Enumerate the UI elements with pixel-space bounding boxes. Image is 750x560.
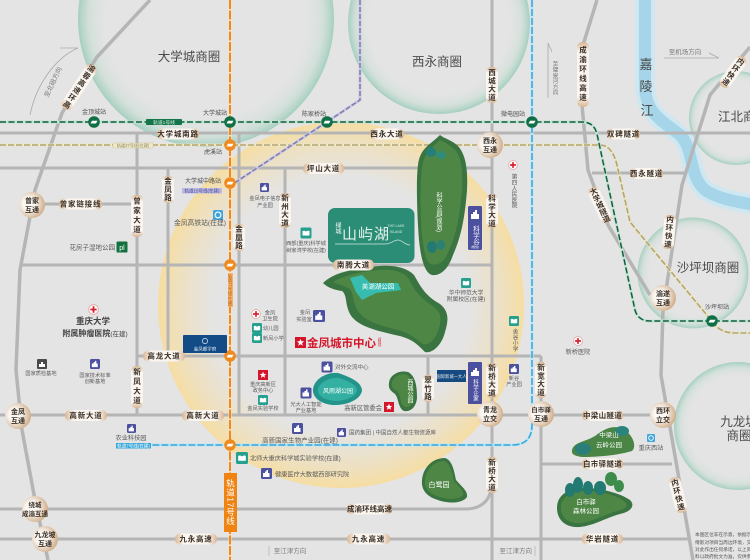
poi: 产业园: 新谷 bbox=[509, 374, 520, 382]
road label: 新州大道: 新州大道 bbox=[280, 192, 290, 227]
interchange: 金凤互通: 互通 bbox=[11, 416, 25, 425]
poi: 国际新城 bbox=[436, 370, 467, 382]
poi: 科学谷: (规划) bbox=[471, 244, 479, 249]
park: 风雨湖公园 bbox=[313, 373, 362, 405]
park: 美湖公园 main green bbox=[323, 266, 447, 352]
poi: 华中师范大学附属校区 bbox=[447, 278, 485, 303]
park: 科学公园(规划): 科学公园(规划) bbox=[435, 191, 442, 232]
road label: 双碑隧道: 双碑隧道 bbox=[607, 128, 640, 138]
line tag: 轨道15号线 bbox=[182, 188, 222, 194]
interchange: 九龙坡互通: 互通 bbox=[38, 539, 52, 548]
interchange: 西环立交: 西环 bbox=[656, 407, 670, 415]
business circle: 江北商圈 bbox=[689, 71, 750, 165]
business circle labels: 西永商圈 bbox=[412, 54, 462, 69]
poi: 产业园 bbox=[506, 364, 522, 388]
road label: 大学城南路: 大学城南路 bbox=[157, 128, 199, 138]
road label: 九永高速 left: 九永高速 bbox=[179, 534, 213, 544]
road label: 坪山大道: 坪山大道 bbox=[307, 163, 340, 173]
poi: 幼儿园: 幼儿园 bbox=[263, 324, 279, 332]
road label: 金凰路: 金凰路 bbox=[234, 224, 244, 250]
disclaimer: 对此作出任何承诺，以上资 bbox=[695, 546, 750, 553]
road label: 南腾大道 bbox=[333, 260, 374, 270]
poi: 金凤电子信息产业园 bbox=[249, 183, 281, 209]
poi: 国药集团 中国自然人都生物资源库 bbox=[337, 428, 436, 437]
interchange: 金凤互通 bbox=[5, 403, 31, 429]
direction: 至江津方向 right bbox=[500, 546, 535, 556]
road label: 西城大道: 西城大道 bbox=[487, 68, 496, 102]
project logo: 山屿湖: ISLAND bbox=[390, 230, 403, 234]
road label: 曾家大道: 曾家大道 bbox=[132, 196, 142, 235]
direction: 至机场方向 bbox=[664, 47, 719, 58]
interchange: 九龙坡互通: 九龙坡 bbox=[34, 530, 56, 539]
poi: 国家质检基地: 国家质检基地 bbox=[25, 369, 57, 377]
river label: 嘉陵江: 江 bbox=[640, 103, 654, 118]
poi: 金凤实验学校: 金凤实验学校 bbox=[247, 404, 279, 412]
interchange: 曾家互通: 曾家 bbox=[25, 196, 39, 205]
business circle labels: 沙坪坝商圈 bbox=[677, 260, 739, 275]
interchange: 绕城成渝互通 bbox=[22, 496, 48, 522]
poi: 健康医疗大数据西部研究院: 健康医疗大数据西部研究院 bbox=[275, 470, 349, 478]
poi: 金凤实验学校 bbox=[247, 395, 279, 412]
interchange: 渝遂互通 bbox=[650, 285, 676, 311]
station names: 大学城中路站 bbox=[185, 177, 221, 185]
poi: 国家质检基地 bbox=[25, 359, 57, 377]
poi: 产业园: 产业园 bbox=[506, 380, 522, 388]
station names: 虎溪站 bbox=[204, 148, 222, 156]
poi: 光大人工智能产业基地: 产业基地 bbox=[296, 406, 316, 414]
station names: 大学城站 bbox=[203, 109, 227, 117]
metro stations: orange line bbox=[224, 139, 236, 451]
poi: 花房子湿地公园: 花房子湿地公园 bbox=[70, 242, 115, 252]
poi: 新桥医院: 新桥医院 bbox=[566, 348, 590, 356]
road label: 成渝环线高速: 成渝环线高速 bbox=[347, 504, 392, 514]
poi: 重庆大学附属肿瘤医院: 重庆大学 bbox=[76, 316, 110, 326]
river label: 嘉陵江: 陵 bbox=[639, 79, 653, 94]
park: 中梁山云岭公园: 中梁山 bbox=[599, 430, 619, 439]
disclaimer: 本图区位非在示意，依据示 bbox=[695, 531, 750, 538]
poi: 科学企家 bbox=[468, 362, 482, 404]
poi: 金凤电子信息产业园: 金凤电子信息 bbox=[249, 194, 281, 202]
poi: 高新国家生物产业园: 高新国家生物产业园(在建) bbox=[262, 436, 338, 444]
poi: 花房子湿地公园: pl bbox=[119, 245, 125, 252]
metro line: 轨道15号线 purple bbox=[230, 0, 360, 186]
direction: 至北碚方向: 至北碚方向 bbox=[42, 65, 64, 99]
park: 美湖公园 main green: 美湖湖公园 bbox=[362, 282, 394, 290]
interchange: 白市驿互通: 互通 bbox=[534, 414, 548, 423]
interchange: 渝遂互通: 互通 bbox=[656, 298, 670, 307]
road label: 内环快速 middle: 内环快速 bbox=[663, 214, 675, 249]
road label: 高新大道 right bbox=[182, 410, 224, 421]
poi: 高新区管委会 bbox=[344, 402, 394, 412]
poi: 重庆大学附属肿瘤医院: 附属肿瘤医院(在建) bbox=[62, 328, 128, 338]
line tag: 轨道7号线 bbox=[116, 442, 151, 450]
river label: 嘉陵江 bbox=[639, 57, 654, 118]
business circle labels bbox=[158, 49, 750, 443]
poi: 西部科学城树家湾学校 bbox=[286, 228, 327, 254]
poi: 北师大重庆科学城实验学校: 北师大重庆科学城实验学校(在建) bbox=[250, 454, 341, 462]
business circle: 沙坪坝商圈 bbox=[638, 218, 748, 328]
poi: 金凤卫生院: 金凤 bbox=[265, 308, 276, 316]
poi: 重庆大学附属肿瘤医院 bbox=[62, 305, 128, 338]
park: 科学公园(规划) bbox=[417, 135, 467, 275]
road label: 成渝环线高速 vertical: 成渝环线高速 bbox=[578, 45, 588, 103]
park: 白市驿森林公园: 森林公园 bbox=[573, 506, 599, 515]
station names: 陈家桥站 bbox=[302, 110, 326, 118]
line tag: 轨道27号线 horizontal: 轨道27号线(在建) bbox=[117, 142, 150, 149]
interchange: 西环立交 bbox=[650, 402, 676, 428]
road label: 中梁山隧道: 中梁山隧道 bbox=[583, 410, 622, 420]
poi: 光大人工智能产业基地: 光大人工智能 bbox=[290, 400, 322, 408]
yellow radius zone around project bbox=[158, 122, 524, 488]
road label: 西永大道: 西永大道 bbox=[370, 128, 404, 138]
poi: 金凤实验室: 实验室 bbox=[296, 315, 312, 323]
interchange: 青龙立交 bbox=[477, 401, 503, 427]
line tag: 轨道1号线 bbox=[146, 119, 182, 126]
poi: 金凤实验室: 金凤 bbox=[300, 308, 311, 316]
line tag: 轨道15号线: 轨道15号线(在建) bbox=[184, 188, 220, 194]
road label: 金凤路: 金凤路 bbox=[163, 176, 172, 202]
poi: 高新国家生物产业园 bbox=[262, 423, 338, 444]
poi: 国家技术标准创新基地: 创新基地 bbox=[85, 377, 105, 385]
project logo: 山屿湖: THE LAKE bbox=[388, 224, 405, 228]
road label: 曾家大道 bbox=[131, 195, 143, 237]
poi: 金凤高铁站 bbox=[174, 210, 226, 227]
poi: 金凤卫生院 bbox=[252, 308, 279, 322]
disclaimer bbox=[695, 531, 750, 560]
road label: 华岩隧道: 华岩隧道 bbox=[586, 534, 619, 544]
poi: 华中师范大学附属校区: 附属校区(在建) bbox=[447, 295, 485, 303]
business circle: 九龙坡商圈 bbox=[674, 362, 750, 490]
road label: 西永隧道: 西永隧道 bbox=[630, 168, 663, 178]
road label: 科学大道: 科学大道 bbox=[487, 193, 496, 228]
interchange: 西永互通: 互通 bbox=[483, 145, 497, 154]
station names bbox=[82, 108, 729, 311]
road label: 高新大道 left: 高新大道 bbox=[69, 410, 103, 420]
road label: 西城大道 bbox=[486, 67, 498, 103]
poi: 重庆高新区政务中心: 政务中心 bbox=[253, 386, 273, 394]
road label: 新桥大道 lower: 新桥大道 bbox=[487, 457, 496, 492]
road label: 九永高速 middle bbox=[347, 534, 390, 544]
metro line: 轨道1号线 green bbox=[0, 122, 750, 321]
poi: 金凤高铁站: 金凤高铁站(在建) bbox=[174, 218, 226, 227]
line tag: 轨道1号线: 轨道1号线 bbox=[153, 119, 175, 126]
interchange: 九龙坡互通 bbox=[32, 526, 58, 552]
poi: 舍谷小学: 舍谷小学 bbox=[511, 328, 518, 352]
road label: 新凤大道 bbox=[131, 366, 143, 408]
callout: 金凤城市中心: 金凤城市中心 bbox=[307, 336, 376, 350]
road label: 曾家链接线: 曾家链接线 bbox=[60, 198, 101, 208]
project logo: 山屿湖 bbox=[328, 208, 414, 263]
poi: 西部科学城树家湾学校: 树家湾学校(在建) bbox=[286, 246, 326, 254]
direction: 至江津方向 left: 至江津方向 bbox=[274, 546, 306, 555]
park: 西城公园 bbox=[389, 371, 417, 411]
road label: 渝蓉高速环高: 渝蓉高速环高 bbox=[60, 62, 98, 111]
road label: 九永高速 middle: 九永高速 bbox=[352, 534, 385, 544]
poi: 重庆高新区政务中心: 重庆高新区 bbox=[250, 380, 276, 388]
road label: 翠竹路: 翠竹路 bbox=[423, 376, 432, 401]
poi: 西部科学城树家湾学校: 西部(重庆)科学城 bbox=[286, 239, 327, 247]
interchange: 渝遂互通: 渝遂 bbox=[656, 289, 670, 298]
line tag: 轨道27号线 horizontal bbox=[113, 142, 153, 149]
poi: 科学谷: 科学谷 bbox=[472, 224, 480, 246]
park: 西城公园: 西城公园 bbox=[406, 379, 413, 404]
interchange: 青龙立交: 立交 bbox=[483, 414, 497, 423]
road label: 南腾大道: 南腾大道 bbox=[337, 260, 370, 270]
poi: 农业科技园 bbox=[116, 424, 146, 442]
metro line: 轨道27号线 tan bbox=[0, 145, 750, 333]
road label: 新宽大道: 新宽大道 bbox=[536, 362, 546, 397]
poi: 新桥医院 bbox=[566, 337, 590, 356]
interchange: 白市驿互通 bbox=[528, 401, 554, 427]
poi: 幼儿园 bbox=[252, 323, 279, 333]
poi: 国家技术标准创新基地: 国家技术标准 bbox=[79, 371, 111, 379]
road label: 成渝环线高速 vertical bbox=[577, 42, 589, 107]
road label: 高龙大道 bbox=[143, 350, 185, 362]
metro line: 轨道7号线 blue bbox=[150, 0, 532, 445]
poi: 花房子湿地公园 bbox=[70, 242, 128, 252]
line tag: 轨道17号线: 轨道17号线 bbox=[226, 479, 236, 526]
river label: 嘉陵江: 嘉 bbox=[639, 57, 653, 72]
project logo: 山屿湖: 山屿湖 bbox=[342, 226, 390, 243]
poi: 金凤都学府: 金凤都学府 bbox=[194, 346, 217, 352]
poi: 对外交流中心: 对外交流中心 bbox=[335, 363, 369, 371]
direction: 至江津方向 left bbox=[269, 546, 306, 556]
road label: 新桥大道 lower bbox=[486, 457, 498, 493]
line tag: 轨道17号线 bbox=[224, 473, 237, 532]
poi: 国药集团 中国自然人都生物资源库: 国药集团 | 中国自然人都生物资源库 bbox=[349, 428, 436, 436]
callout: 金凤城市中心 bbox=[295, 336, 382, 350]
road label: 内环快速 top: 内环快速 bbox=[719, 55, 747, 88]
poi: 重庆西站 bbox=[639, 434, 663, 452]
business circle: 西永商圈 bbox=[348, 0, 530, 114]
road label: 白市驿隧道: 白市驿隧道 bbox=[583, 458, 622, 468]
interchange: 曾家互通: 互通 bbox=[25, 205, 39, 214]
poi: 国际新城: 国际新城一大人 bbox=[436, 373, 467, 380]
road label: 新桥大道 upper: 新桥大道 bbox=[487, 362, 496, 397]
poi: 金凤卫生院: 卫生院 bbox=[262, 314, 279, 322]
park: 白鹭园: 白鹭园 bbox=[428, 480, 450, 489]
direction: 至璧泉河方向 bbox=[548, 43, 558, 98]
metro line: 轨道17号线 orange bbox=[228, 0, 232, 560]
poi: 金凤电子信息产业园: 产业园 bbox=[257, 201, 273, 209]
road label: 高新大道 right: 高新大道 bbox=[186, 410, 220, 420]
station names: 沙坪坝站 bbox=[705, 303, 729, 311]
park: 风雨湖公园: 风雨湖公园 bbox=[323, 387, 353, 395]
station names: 微电园站 bbox=[501, 110, 525, 118]
road label: 高新大道 left bbox=[65, 410, 107, 421]
river: 嘉陵江 bbox=[645, 0, 750, 206]
road label: 高龙大道: 高龙大道 bbox=[147, 350, 181, 360]
poi: 高新区管委会: 高新区管委会 bbox=[344, 403, 383, 412]
poi: 华中师范大学附属校区: 华中师范大学 bbox=[449, 288, 484, 296]
poi: 北师大重庆科学城实验学校 bbox=[236, 452, 341, 464]
interchange: 西永互通: 西永 bbox=[483, 136, 497, 145]
interchange: 青龙立交: 青龙 bbox=[483, 405, 497, 414]
direction: 至璧泉河方向: 至璧泉河方向 bbox=[551, 61, 558, 96]
park: 中梁山云岭公园: 云岭公园 bbox=[596, 440, 622, 449]
poi: 第四人民医院: 第四人民医院 bbox=[510, 173, 517, 210]
callout: 金凤城市中心: (规划) bbox=[377, 337, 382, 347]
poi: 第四人民医院 bbox=[509, 161, 517, 210]
park: 中梁山云岭公园 bbox=[572, 426, 634, 457]
road label: 新凤大道: 新凤大道 bbox=[132, 367, 142, 406]
direction: 至北碚方向 bbox=[30, 48, 78, 115]
poi: 国家技术标准创新基地 bbox=[79, 359, 111, 385]
road label: 九永高速 left bbox=[175, 534, 217, 544]
interchange: 西永互通 bbox=[477, 132, 503, 158]
road label: 华岩隧道 bbox=[582, 534, 623, 544]
interchange: 绕城成渝互通: 绕城 bbox=[28, 500, 42, 509]
road label: 金凤路 bbox=[162, 176, 174, 203]
poi: 农业科技园: 农业科技园 bbox=[116, 434, 146, 442]
poi: 金凤实验室 bbox=[296, 308, 325, 323]
interchange: 绕城成渝互通: 成渝互通 bbox=[22, 509, 48, 518]
poi: 科学企家: 科学企家 bbox=[472, 378, 479, 401]
road label: 大学城隧道: 大学城隧道 bbox=[587, 185, 612, 225]
park: 白鹭园 bbox=[422, 458, 467, 503]
business circle: 大学城商圈 bbox=[78, 0, 334, 147]
disclaimer: 傅影对项目当周边环境，交 bbox=[695, 539, 750, 546]
direction: 至江津方向 right: 至江津方向 bbox=[500, 546, 532, 555]
poi: 健康医疗大数据西部研究院 bbox=[261, 468, 349, 479]
poi: 光大人工智能产业基地 bbox=[290, 388, 322, 414]
direction: 至机场方向: 至机场方向 bbox=[669, 47, 701, 56]
poi: 重庆高新区政务中心 bbox=[250, 370, 276, 394]
metro stations: green line bbox=[88, 116, 718, 327]
interchange: 金凤互通: 金凤 bbox=[11, 407, 25, 416]
poi: 金凤都学府 bbox=[183, 335, 227, 353]
station names: 金顶城站 bbox=[82, 108, 106, 116]
poi: 新凤小学 bbox=[252, 333, 284, 343]
interchange: 白市驿互通: 白市驿 bbox=[531, 405, 551, 414]
road label: 新宽大道 bbox=[535, 362, 547, 398]
road label: 翠竹路 bbox=[422, 375, 434, 402]
road label: 金凰路 bbox=[233, 224, 245, 251]
road label: 内环快速 bottom: 内环快速 bbox=[669, 476, 686, 513]
poi: 重庆西站: 重庆西站 bbox=[639, 444, 663, 452]
poi: 科学谷 bbox=[468, 206, 482, 250]
poi: 对外交流中心 bbox=[322, 362, 369, 372]
park: 白市驿森林公园 bbox=[557, 472, 632, 527]
business circle labels: 大学城商圈 bbox=[158, 49, 220, 64]
line tag: 轨道27号线 vertical: 轨道27号线(在建) bbox=[227, 272, 233, 307]
project logo: 山屿湖: 绿城 bbox=[334, 221, 341, 235]
interchange: 西环立交: 立交 bbox=[656, 415, 670, 424]
park: 白市驿森林公园: 白市驿 bbox=[576, 497, 596, 506]
poi: 舍谷小学 bbox=[509, 316, 519, 352]
road label: 坪山大道 bbox=[303, 163, 344, 174]
interchange: 曾家互通 bbox=[19, 192, 45, 218]
line tag: 轨道7号线: 轨道7号线(在建) bbox=[117, 442, 150, 450]
poi: 新凤小学: 新凤小学 bbox=[263, 334, 284, 342]
